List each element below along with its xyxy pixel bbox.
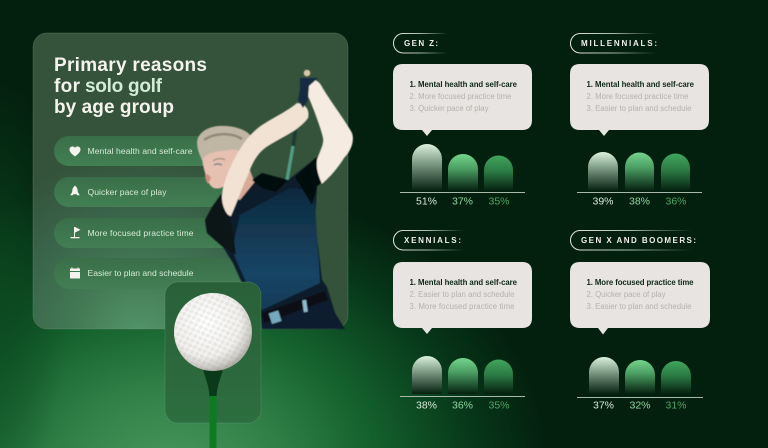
title: for <box>54 76 81 97</box>
speech bubble <box>393 262 532 334</box>
speech bubble: 1. Mental health and self-care <box>586 80 695 89</box>
pill: focused practice <box>54 218 254 248</box>
speech bubble: 3. Quicker pace of play <box>410 104 489 113</box>
speech bubble: 2. More focused practice time <box>586 92 688 101</box>
speech bubble: 2. More focused practice time <box>410 92 512 101</box>
speech bubble: 3. More focused practice time <box>410 302 514 311</box>
pill: mental health: Mental health and self-care <box>88 146 193 156</box>
pill: easier to plan <box>54 258 259 289</box>
shirt <box>205 157 345 329</box>
golf club <box>287 118 297 180</box>
title <box>54 55 207 118</box>
speech bubble: 2. Easier to plan and schedule <box>410 290 514 299</box>
label: XENNIALS: <box>404 236 461 245</box>
speech bubble: 1. More focused practice time <box>586 278 694 287</box>
speech bubble: 1. Mental health and self-care <box>410 278 518 287</box>
speech bubble <box>570 262 710 334</box>
bar chart: 36% <box>665 196 687 208</box>
label <box>570 230 706 250</box>
group: Gen X and Boomers <box>570 230 710 412</box>
pill: focused practice: More focused practice time <box>88 228 194 238</box>
label <box>394 34 454 53</box>
speech bubble <box>570 64 709 136</box>
speech bubble: 1. Mental health and self-care <box>410 80 518 89</box>
label: GEN X AND BOOMERS: <box>581 236 696 245</box>
icon: heart <box>69 146 81 156</box>
pill: quicker pace: Quicker pace of play <box>88 187 167 197</box>
speech bubble: 2. Quicker pace of play <box>586 290 666 299</box>
bar chart: 38% <box>629 196 650 208</box>
glove <box>298 78 318 108</box>
label: MILLENNIALS: <box>581 39 657 48</box>
label: GEN Z: <box>404 39 438 48</box>
icon: flag <box>70 227 80 238</box>
icon: rocket <box>70 186 80 195</box>
golf ball <box>174 293 252 371</box>
bar chart: 35% <box>488 400 510 412</box>
bar chart: 37% <box>593 400 614 412</box>
speech bubble <box>393 64 532 136</box>
speech bubble: 3. Easier to plan and schedule <box>586 104 692 113</box>
bar chart <box>577 152 702 208</box>
bar chart <box>577 357 703 412</box>
bar chart: 38% <box>416 400 437 412</box>
head <box>197 126 251 189</box>
reason pills <box>54 136 259 289</box>
group: Xennials <box>393 230 532 412</box>
speech bubble: 3. Easier to plan and schedule <box>586 302 692 311</box>
bar chart: 51% <box>416 196 437 208</box>
label <box>570 34 666 53</box>
neck <box>228 165 258 206</box>
label <box>394 230 472 250</box>
title: by age group <box>54 97 174 118</box>
pill: easier to plan: Easier to plan and schedule <box>88 268 194 278</box>
card: golf ball on tee <box>165 282 261 448</box>
tee <box>203 369 223 448</box>
group: Millennials <box>570 34 709 208</box>
group: Gen Z <box>393 34 532 208</box>
bar chart: 36% <box>452 400 473 412</box>
front arm <box>222 103 309 216</box>
bar chart <box>400 356 525 412</box>
bar chart: 37% <box>452 196 473 208</box>
rear arm <box>307 80 353 184</box>
pill: mental health <box>54 136 244 166</box>
club grip end <box>304 70 310 76</box>
bar chart: 35% <box>488 196 510 208</box>
bar chart: 39% <box>592 196 614 208</box>
title: Primary reasons <box>54 55 207 76</box>
title: solo golf <box>85 76 163 97</box>
panel: primary reasons <box>33 33 348 329</box>
icon: calendar <box>70 268 80 278</box>
bar chart: 31% <box>665 400 687 412</box>
golfer photo <box>197 70 353 329</box>
bar chart: 32% <box>629 400 651 412</box>
bar chart <box>400 144 525 208</box>
belt and trousers <box>262 291 345 329</box>
pill: quicker pace <box>54 177 249 207</box>
